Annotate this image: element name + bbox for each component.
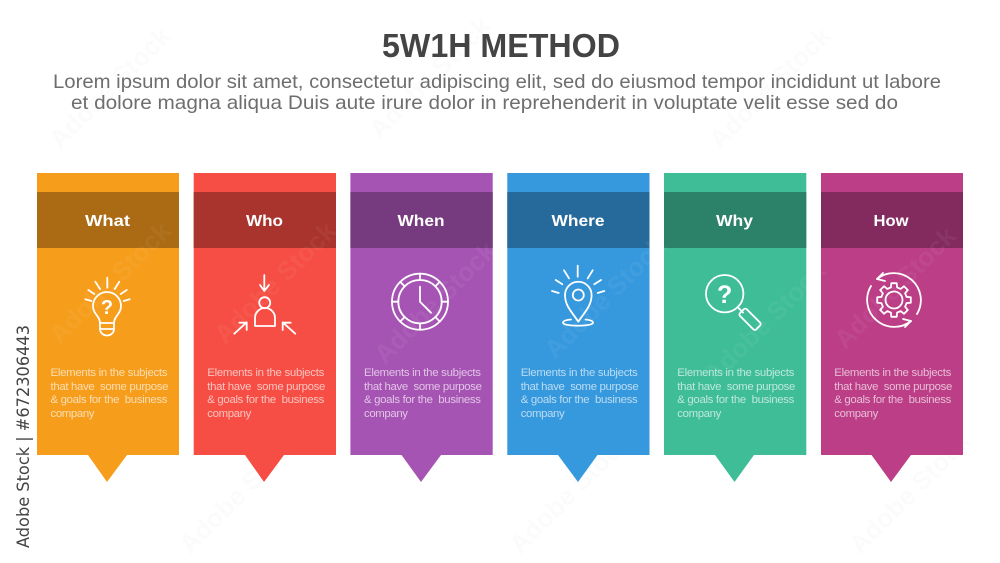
card body with pointer	[350, 173, 493, 482]
description: company	[364, 408, 408, 420]
heading: Where: Where	[552, 213, 605, 230]
description: & goals for the business	[364, 394, 481, 406]
header band: When	[350, 192, 493, 248]
heading: Who: Who	[246, 213, 283, 230]
description: & goals for the business	[677, 394, 795, 406]
panel: When	[350, 173, 493, 482]
card body with pointer	[507, 173, 650, 482]
subtitle text: Lorem ipsum dolor sit amet, consectetur adipiscing elit, sed do eiusmod tempor incididunt ut labore	[53, 71, 941, 93]
description: that have some purpose	[834, 381, 952, 393]
heading: What: What	[85, 213, 131, 230]
description: that have some purpose	[207, 381, 325, 393]
text: Adobe Stock	[363, 10, 497, 144]
icon: clock in segmented ring	[392, 274, 448, 330]
panel: Who	[194, 173, 336, 482]
subtitle text: et dolore magna aliqua Duis aute irure dolor in reprehenderit in voluptate velit esse sed do	[71, 92, 898, 114]
description: & goals for the business	[50, 394, 168, 406]
description: & goals for the business	[207, 394, 325, 406]
card body with pointer	[194, 173, 336, 482]
description: company	[207, 408, 252, 420]
icon: light bulb with question mark	[85, 278, 130, 336]
text: Adobe Stock	[43, 215, 177, 349]
card body with pointer	[664, 173, 806, 482]
text: Adobe Stock	[208, 215, 342, 349]
heading: Why: Why	[716, 213, 753, 230]
description	[521, 367, 639, 420]
description: & goals for the business	[521, 394, 638, 406]
stock id side label: Adobe Stock | #672306443	[14, 325, 34, 548]
description: that have some purpose	[677, 381, 795, 393]
description: that have some purpose	[50, 381, 168, 393]
panel: What	[37, 173, 179, 482]
description: that have some purpose	[521, 381, 639, 393]
header band: Why	[664, 192, 806, 248]
description: that have some purpose	[364, 381, 482, 393]
description	[677, 367, 795, 420]
icon: person with inward arrows	[234, 275, 295, 334]
header band: What	[37, 192, 179, 248]
text: Adobe Stock	[43, 20, 177, 154]
description: & goals for the business	[834, 394, 952, 406]
card body with pointer	[821, 173, 963, 482]
icon: magnifier with question mark: ?	[717, 281, 732, 309]
header band: How	[821, 192, 963, 248]
text: Adobe Stock	[828, 220, 962, 354]
text: Adobe Stock	[368, 235, 502, 369]
heading: When: When	[398, 213, 444, 230]
description: Elements in the subjects	[364, 367, 481, 379]
description: company	[521, 408, 565, 420]
description: Elements in the subjects	[207, 367, 325, 379]
description	[50, 367, 168, 420]
description: Elements in the subjects	[521, 367, 638, 379]
description	[364, 367, 482, 420]
title: 5W1H METHOD	[382, 27, 620, 64]
description: Elements in the subjects	[834, 367, 952, 379]
icon: light bulb with question mark: ?	[101, 297, 113, 319]
text: Adobe Stock	[698, 255, 832, 389]
icon: map pin with rays	[552, 266, 604, 326]
text: Adobe Stock	[503, 425, 637, 559]
panel: How	[821, 173, 963, 482]
description: company	[677, 408, 722, 420]
heading: How: How	[874, 213, 909, 230]
header band: Who	[194, 192, 336, 248]
description	[834, 367, 952, 420]
panel: Where	[507, 173, 650, 482]
icon: magnifier with question mark	[706, 275, 762, 331]
text: Adobe Stock	[173, 425, 307, 559]
description: Elements in the subjects	[50, 367, 168, 379]
text: Adobe Stock	[538, 230, 672, 364]
description: company	[50, 408, 95, 420]
description: Elements in the subjects	[677, 367, 795, 379]
icon: gear with circular arrows	[867, 273, 921, 327]
header band: Where	[507, 192, 650, 248]
panel: Why	[664, 173, 806, 482]
description: company	[834, 408, 879, 420]
description	[207, 367, 325, 420]
text: Adobe Stock	[843, 425, 977, 559]
text: Adobe Stock	[703, 20, 837, 154]
card body with pointer	[37, 173, 179, 482]
subtitle text	[53, 71, 941, 114]
